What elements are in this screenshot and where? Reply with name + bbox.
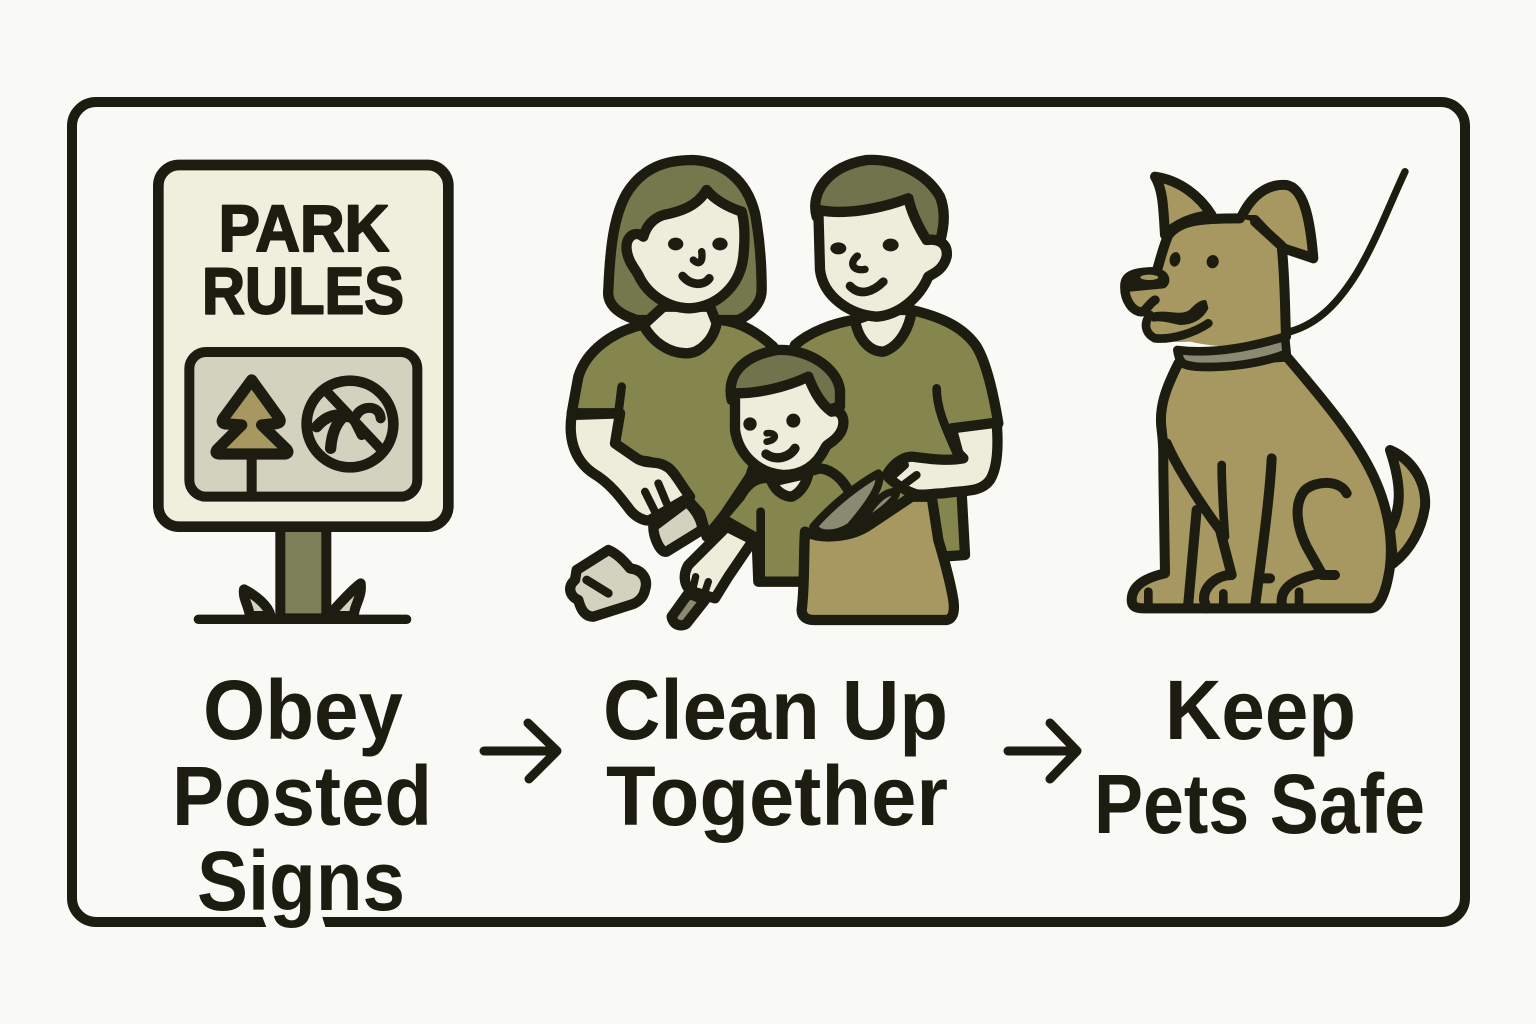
icon: dog on leash bbox=[1125, 172, 1425, 608]
sign post bbox=[280, 527, 326, 618]
grass right bbox=[328, 583, 361, 616]
icon: park rules sign bbox=[158, 165, 448, 619]
label: Keep Pets Safe: Pets Safe bbox=[1094, 757, 1425, 851]
icon: no dogs bbox=[307, 381, 393, 467]
ground line bbox=[198, 605, 407, 633]
frame gap under Signs descender bbox=[262, 916, 326, 929]
arrow 1 bbox=[484, 723, 557, 779]
left ear bbox=[1155, 177, 1212, 235]
man arm and hand bbox=[887, 388, 998, 495]
label: Obey Posted Signs bbox=[172, 663, 432, 928]
frame panel bbox=[72, 102, 1465, 922]
right ear bbox=[1240, 185, 1313, 258]
crumpled litter bbox=[570, 550, 646, 617]
body bbox=[1132, 357, 1391, 608]
pictogram panel bbox=[189, 352, 417, 497]
leash bbox=[1290, 172, 1405, 332]
label: Clean Up Together bbox=[603, 663, 948, 843]
icon: tree bbox=[216, 380, 288, 493]
label: Obey Posted Signs: Obey bbox=[203, 663, 403, 757]
label: Obey Posted Signs: Posted bbox=[172, 749, 432, 843]
dog mouth bbox=[1146, 302, 1208, 339]
sign board bbox=[158, 165, 448, 527]
collar bbox=[1177, 337, 1287, 367]
label: Keep Pets Safe bbox=[1094, 663, 1425, 851]
child bbox=[672, 350, 850, 625]
dog eyes bbox=[1168, 251, 1220, 270]
label: Keep Pets Safe: Keep bbox=[1165, 663, 1356, 757]
held litter bbox=[653, 502, 702, 552]
grass left bbox=[244, 589, 271, 616]
arrow 2 bbox=[1008, 723, 1077, 779]
tan bag bbox=[802, 473, 954, 620]
sign title: PARK bbox=[219, 191, 390, 265]
sign title: RULES bbox=[202, 253, 404, 327]
leg lines bbox=[1148, 443, 1347, 608]
label: Clean Up Together: Together bbox=[606, 749, 948, 843]
man bbox=[750, 160, 998, 557]
icon: family cleaning up litter bbox=[570, 160, 998, 625]
head fill bbox=[1125, 218, 1286, 346]
dog nose bbox=[1125, 272, 1166, 288]
sign title bbox=[202, 191, 404, 327]
tail bbox=[1390, 450, 1425, 563]
label: Clean Up Together: Clean Up bbox=[603, 663, 948, 757]
head outline bbox=[1125, 218, 1286, 337]
label: Obey Posted Signs: Signs bbox=[197, 834, 405, 928]
woman bbox=[571, 160, 783, 552]
